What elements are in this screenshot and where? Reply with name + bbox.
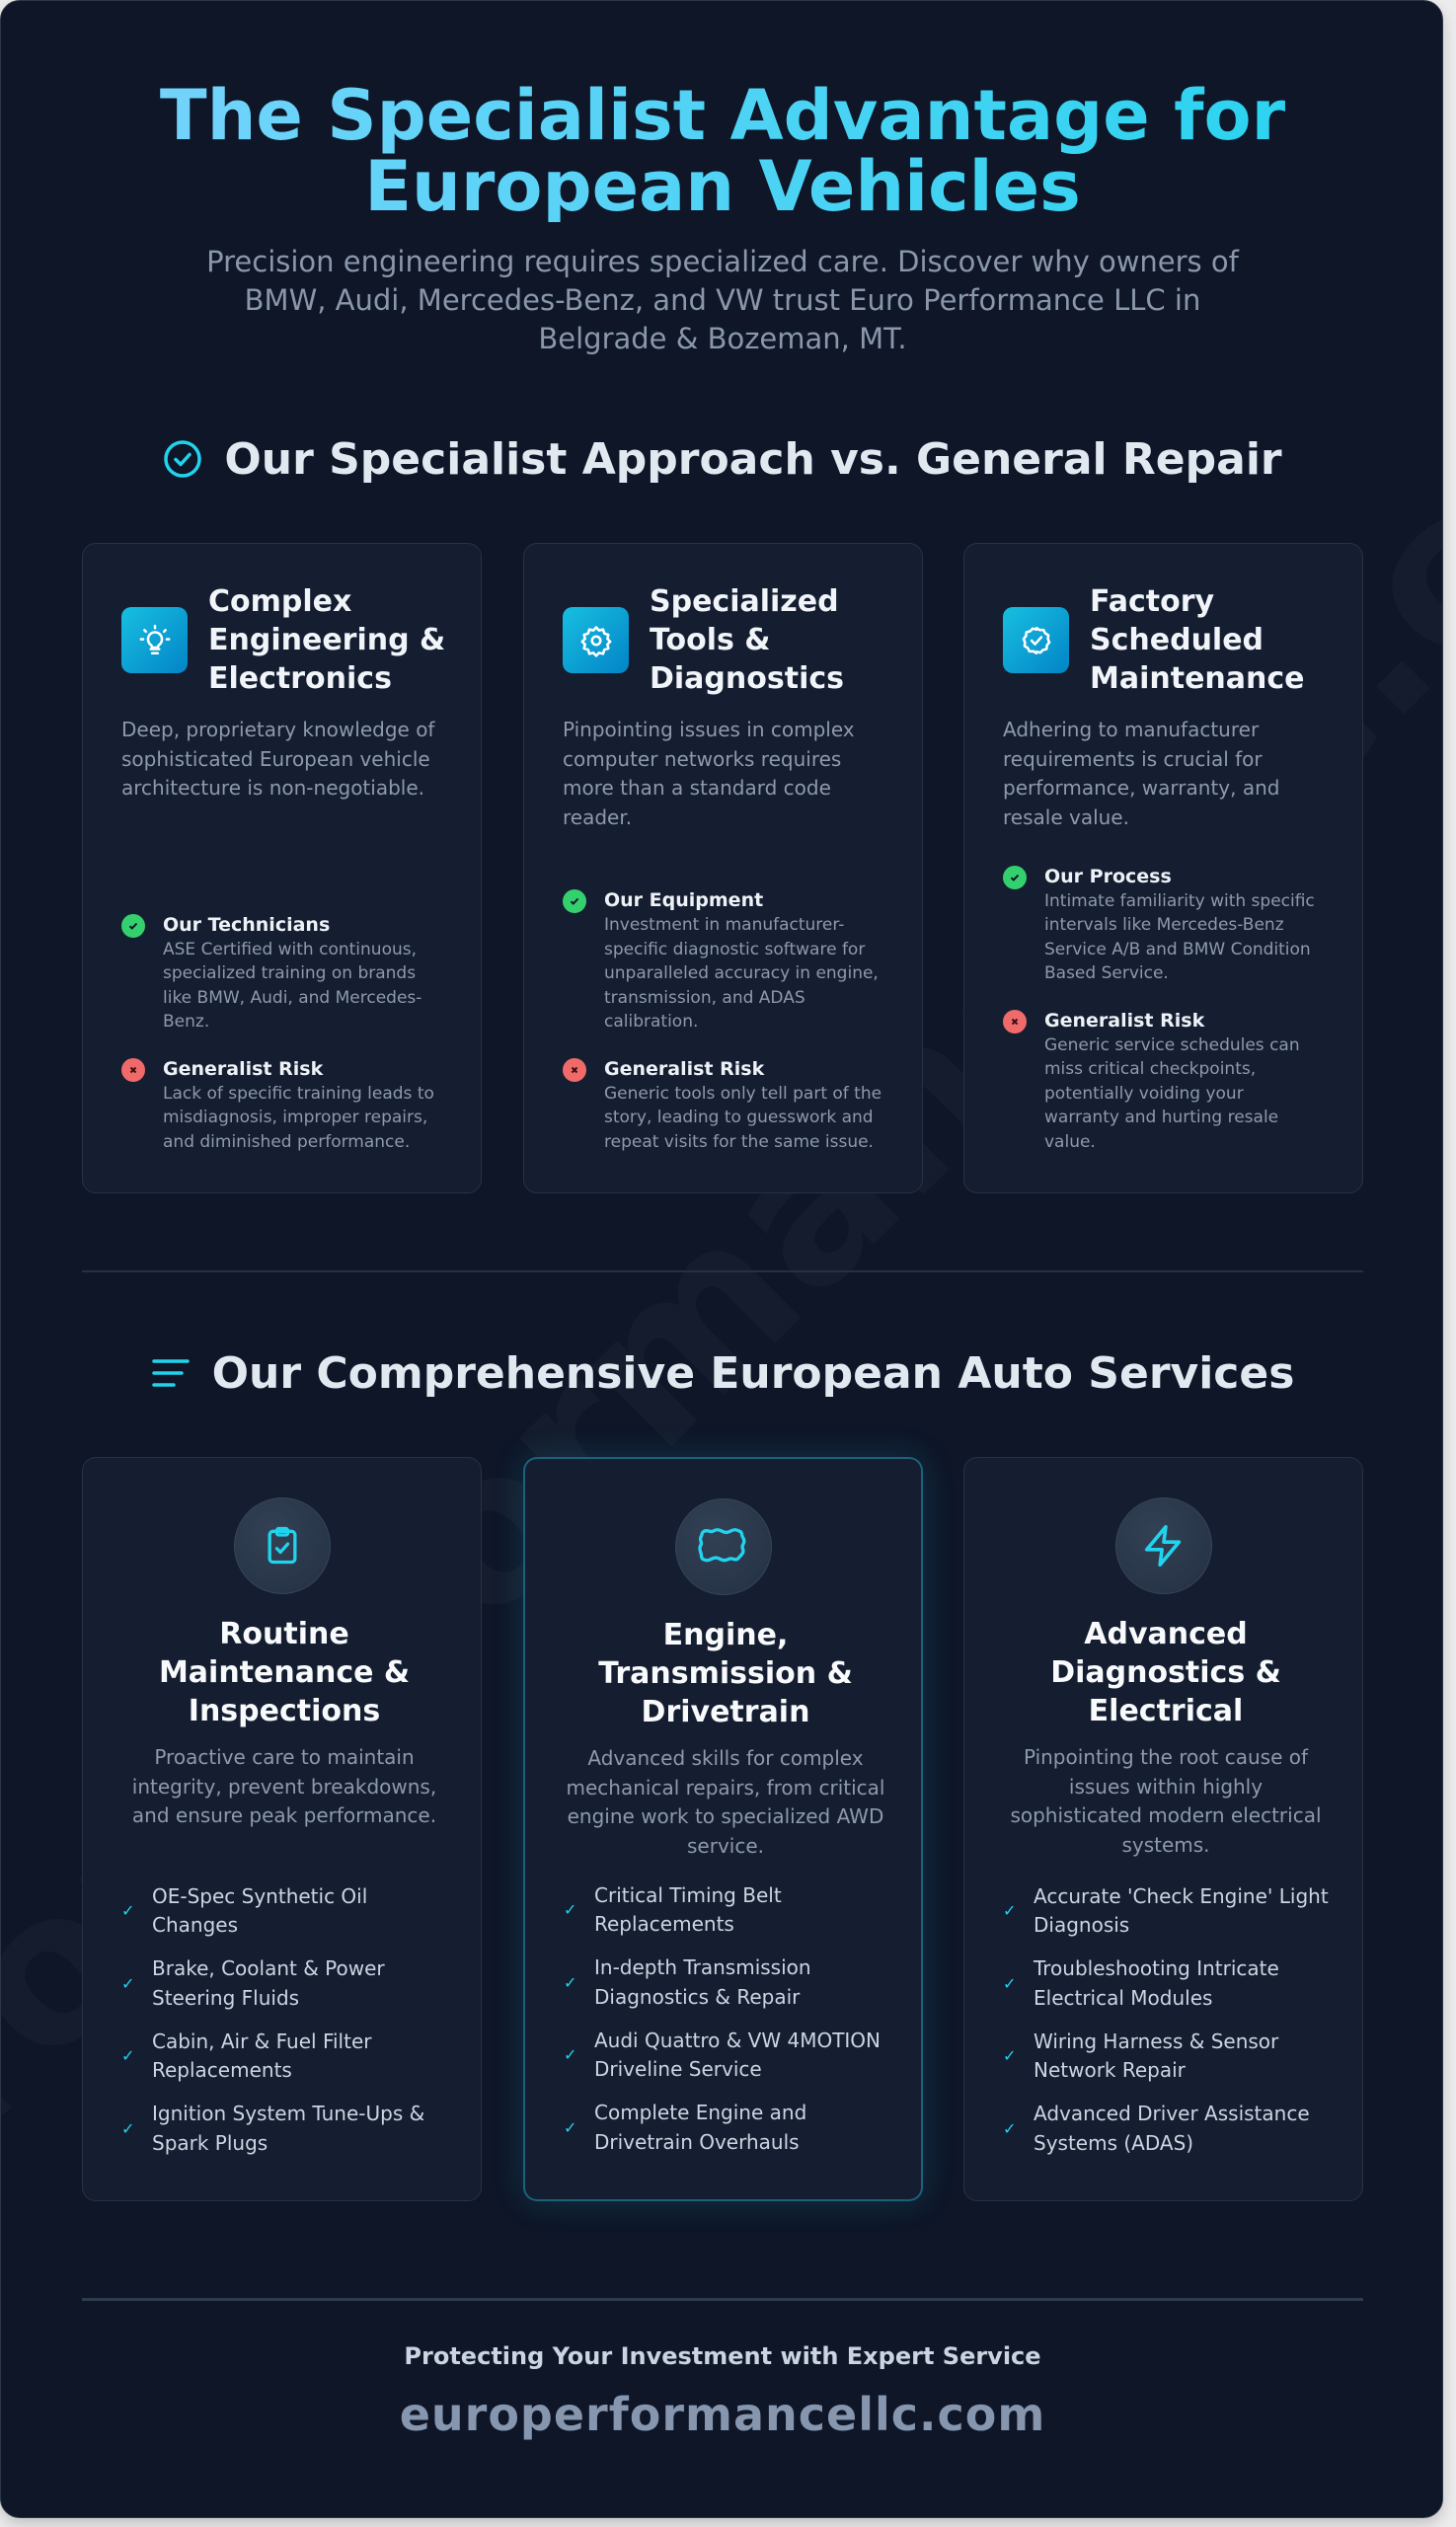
description: Proactive care to maintain integrity, prevent breakdowns, and ensure peak performance. <box>132 1745 436 1827</box>
list: ✓ <box>564 1900 576 1919</box>
list <box>1003 1883 1329 2154</box>
description: Adhering to manufacturer requirements is crucial for performance, warranty, and resale value. <box>1003 718 1279 829</box>
items <box>121 914 434 1151</box>
items: Generic service schedules can miss critical checkpoints, potentially voiding your warranty and hurting resale value. <box>1044 1034 1300 1151</box>
list: ✓ <box>564 2045 576 2064</box>
list: ✓ <box>1003 1974 1016 1993</box>
card header <box>563 584 844 696</box>
icon: lightning <box>1115 1497 1212 1594</box>
icon: check circle <box>164 440 201 478</box>
panel: routine maintenance <box>82 1457 482 2201</box>
list: Cabin, Air & Fuel Filter Replacements <box>152 2029 371 2082</box>
items: Generalist Risk <box>604 1058 764 1080</box>
panel: specialized tools <box>523 543 923 1193</box>
card header: Specialized Tools & Diagnostics <box>650 584 844 696</box>
items: Our Technicians <box>163 914 330 936</box>
list: ✓ <box>1003 2046 1016 2065</box>
list: OE-Spec Synthetic Oil Changes <box>152 1883 367 1937</box>
list: ✓ <box>1003 2119 1016 2138</box>
title: European Vehicles <box>364 146 1081 227</box>
items: Intimate familiarity with specific intervals like Mercedes-Benz Service A/B and BMW Condition Based Service. <box>1044 890 1315 983</box>
items <box>563 889 881 1151</box>
heading: specialist approach: Our Specialist Approach vs. General Repair <box>224 434 1282 484</box>
list: Accurate 'Check Engine' Light Diagnosis <box>1034 1883 1329 1937</box>
panel: factory maintenance <box>963 543 1363 1193</box>
list: In-depth Transmission Diagnostics & Repair <box>594 1955 811 2008</box>
list: Complete Engine and Drivetrain Overhauls <box>594 2101 806 2154</box>
items: Generalist Risk <box>163 1058 323 1080</box>
items: ASE Certified with continuous, specialized training on brands like BMW, Audi, and Mercedes-Benz. <box>163 940 421 1032</box>
footer tagline: Protecting Your Investment with Expert Service <box>404 2342 1041 2370</box>
description: Pinpointing the root cause of issues within highly sophisticated modern electrical systems. <box>1010 1745 1322 1856</box>
card header: Complex Engineering & Electronics <box>208 584 445 696</box>
items <box>1003 865 1315 1151</box>
icon: engine <box>675 1498 772 1595</box>
list: ✓ <box>121 2046 134 2065</box>
panel: engine transmission <box>523 1457 923 2201</box>
panel: complex engineering <box>82 543 482 1193</box>
list: Critical Timing Belt Replacements <box>594 1883 782 1936</box>
card title: Engine, Transmission & Drivetrain <box>598 1618 853 1729</box>
items: Investment in manufacturer-specific diagnostic software for unparalleled accuracy in engine, transmission, and ADAS calibration. <box>604 915 879 1032</box>
footer url: europerformancellc.com <box>400 2388 1045 2441</box>
card title: Routine Maintenance & Inspections <box>159 1617 410 1728</box>
list: Brake, Coolant & Power Steering Fluids <box>152 1956 385 2010</box>
list: Advanced Driver Assistance Systems (ADAS) <box>1034 2102 1310 2154</box>
list: ✓ <box>121 1901 134 1920</box>
title: The Specialist Advantage for <box>160 75 1285 156</box>
list <box>564 1883 881 2154</box>
description: Advanced skills for complex mechanical repairs, from critical engine work to specialized AWD service. <box>567 1746 884 1858</box>
list: ✓ <box>564 2118 576 2137</box>
description: Pinpointing issues in complex computer networks requires more than a standard code reader. <box>563 718 855 829</box>
list: Ignition System Tune-Ups & Spark Plugs <box>152 2102 424 2154</box>
items: Our Process <box>1044 865 1172 886</box>
list: ✓ <box>564 1973 576 1992</box>
items: Lack of specific training leads to misdiagnosis, improper repairs, and diminished performance. <box>163 1084 434 1151</box>
items: Our Equipment <box>604 889 763 911</box>
icon: clipboard <box>233 1497 330 1594</box>
card title: Advanced Diagnostics & Electrical <box>1050 1617 1281 1728</box>
list: ✓ <box>121 1974 134 1993</box>
description: Deep, proprietary knowledge of sophisticated European vehicle architecture is non-negotiable. <box>121 718 434 800</box>
list: Wiring Harness & Sensor Network Repair <box>1034 2029 1278 2082</box>
heading: services: Our Comprehensive European Auto Services <box>212 1348 1294 1398</box>
items: Generic tools only tell part of the story, leading to guesswork and repeat visits for the same issue. <box>604 1084 881 1151</box>
list <box>121 1883 424 2154</box>
title <box>1 80 1444 222</box>
list: Audi Quattro & VW 4MOTION Driveline Service <box>594 2028 881 2081</box>
icon: menu lines <box>152 1359 190 1387</box>
panel: diagnostics electrical <box>963 1457 1363 2201</box>
list: ✓ <box>121 2119 134 2138</box>
list: ✓ <box>1003 1901 1016 1920</box>
list: Troubleshooting Intricate Electrical Modules <box>1034 1956 1279 2010</box>
subtitle: Precision engineering requires specialized care. Discover why owners of BMW, Audi, Mercedes-Benz, and VW trust Euro Performance LLC in Belgrade & Bozeman, MT. <box>206 245 1239 355</box>
items: Generalist Risk <box>1044 1009 1204 1031</box>
card header: Factory Scheduled Maintenance <box>1090 584 1305 696</box>
